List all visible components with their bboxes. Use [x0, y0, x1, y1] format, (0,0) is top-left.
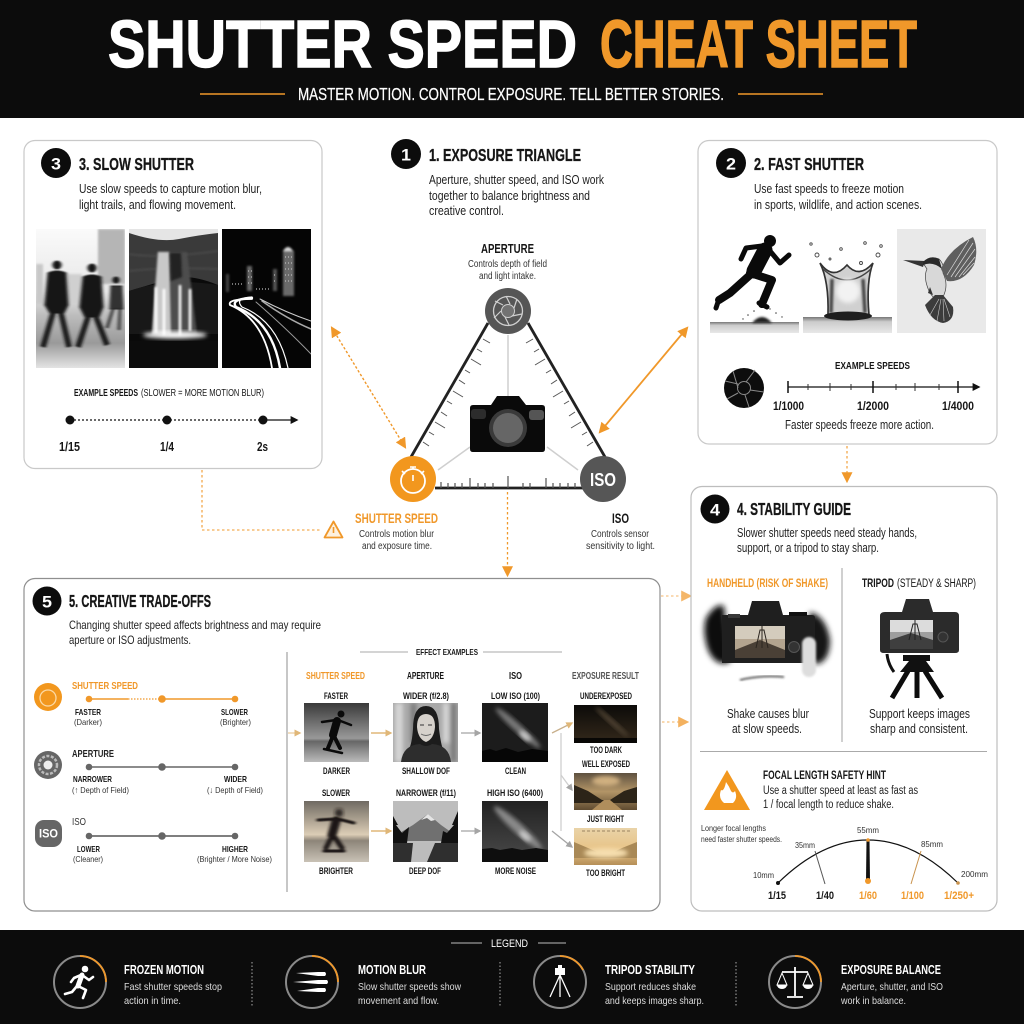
handheld camera illustration	[704, 601, 830, 688]
legend: tripod stability: Support reduces shake	[605, 981, 696, 993]
panel: slow shutter	[24, 140, 322, 468]
trade-off: iso	[35, 816, 272, 864]
row one labels: FASTER	[324, 691, 348, 702]
photo: too bright	[574, 828, 637, 865]
focal length gauge: 1/15	[768, 890, 786, 902]
icon: warning	[324, 522, 342, 538]
description: Slower shutter speeds need steady hands,	[737, 526, 917, 540]
focal length gauge: 1/40	[816, 890, 834, 902]
note: need faster shutter speeds.	[701, 835, 782, 844]
trade-off: shutter speed: SHUTTER SPEED	[72, 680, 138, 692]
aperture label	[468, 241, 547, 282]
description: light trails, and flowing movement.	[79, 198, 236, 212]
photo: underexposed	[574, 705, 637, 743]
label	[582, 745, 630, 769]
heading: 2. FAST SHUTTER	[754, 154, 864, 174]
focal length gauge: 85mm	[921, 839, 943, 849]
photo: blurred skater	[304, 801, 369, 862]
panel: stability guide	[691, 486, 997, 911]
photo: portrait	[393, 703, 458, 762]
legend: motion blur: MOTION BLUR	[358, 963, 426, 977]
title	[108, 7, 917, 82]
legend: motion blur	[286, 956, 461, 1008]
description: support, or a tripod to stay sharp.	[737, 541, 879, 555]
legend: frozen motion	[54, 956, 222, 1008]
shutter speed label: and exposure time.	[362, 541, 432, 552]
timeline	[773, 381, 979, 413]
subtitle: MASTER MOTION. CONTROL EXPOSURE. TELL BETTER STORIES.	[298, 84, 724, 104]
timeline: 1/4000	[942, 399, 974, 413]
handheld caption: Shake causes blur	[727, 707, 809, 721]
handheld caption: at slow speeds.	[732, 722, 802, 736]
trade-off: aperture: (↑ Depth of Field)	[72, 785, 129, 795]
column headings	[306, 671, 639, 682]
focal length hint: 1 / focal length to reduce shake.	[763, 799, 894, 811]
legend: exposure balance: work in balance.	[840, 995, 906, 1007]
legend: motion blur: Slow shutter speeds show	[358, 981, 461, 993]
icon: ISO: ISO	[590, 469, 616, 490]
heading: 1. EXPOSURE TRIANGLE	[429, 145, 581, 165]
photo: water splash	[803, 241, 892, 333]
header band	[0, 0, 1024, 118]
note: Longer focal lengths	[701, 824, 766, 833]
description: together to balance brightness and	[429, 189, 590, 203]
photo: waterfall	[129, 229, 218, 368]
photo: frozen skater	[304, 703, 369, 762]
legend heading: LEGEND	[491, 938, 528, 950]
trade-off: aperture: NARROWER	[73, 774, 112, 784]
trade-off: shutter speed	[34, 680, 251, 727]
focal length gauge	[753, 825, 988, 902]
legend: frozen motion: action in time.	[124, 995, 181, 1007]
legend: motion blur: movement and flow.	[358, 995, 439, 1007]
tripod caption	[869, 707, 970, 736]
legend: exposure balance: Aperture, shutter, and ISO	[841, 981, 943, 993]
timeline: 1/2000	[857, 399, 889, 413]
timeline: 1/4	[160, 440, 174, 454]
iso label: Controls sensor	[591, 529, 650, 540]
label: WELL EXPOSED	[582, 759, 630, 769]
timeline	[59, 416, 297, 454]
trade-off: aperture: APERTURE	[72, 748, 114, 760]
handheld heading: HANDHELD (RISK OF SHAKE)	[707, 578, 828, 590]
heading: 5. CREATIVE TRADE-OFFS	[69, 591, 211, 611]
description	[429, 173, 605, 218]
description: aperture or ISO adjustments.	[69, 633, 191, 647]
tripod caption: Support keeps images	[869, 707, 970, 721]
focal length hint: FOCAL LENGTH SAFETY HINT	[763, 770, 886, 782]
legend band	[0, 930, 1024, 1024]
row one labels: LOW ISO (100)	[491, 691, 540, 702]
legend: frozen motion: FROZEN MOTION	[124, 963, 204, 977]
row two labels: SLOWER	[322, 788, 350, 799]
column headings: APERTURE	[407, 671, 444, 682]
tripod heading: (STEADY & SHARP)	[897, 578, 976, 590]
description: Aperture, shutter speed, and ISO work	[429, 173, 605, 187]
row two labels	[319, 788, 543, 877]
trade-off: aperture: (↓ Depth of Field)	[207, 785, 263, 795]
badge 1: 1	[401, 146, 411, 164]
legend: exposure balance: EXPOSURE BALANCE	[841, 963, 941, 977]
badge 4: 4	[710, 500, 721, 520]
focal length gauge: 35mm	[795, 840, 815, 850]
icon: shutter	[724, 368, 764, 408]
panel: exposure triangle	[324, 139, 655, 552]
description	[69, 618, 321, 647]
trade-off: iso: ISO	[72, 816, 86, 828]
description: Use fast speeds to freeze motion	[754, 182, 904, 196]
timeline: 2s	[257, 440, 268, 454]
row one labels: UNDEREXPOSED	[580, 691, 632, 702]
timeline: 1/1000	[773, 399, 804, 413]
shutter speed label: SHUTTER SPEED	[355, 510, 438, 526]
row two labels: NARROWER (f/11)	[396, 788, 456, 799]
note	[701, 824, 782, 844]
icon: aperture	[485, 288, 531, 334]
row one labels	[323, 691, 632, 777]
effect examples heading: EFFECT EXAMPLES	[416, 647, 478, 657]
tripod caption: sharp and consistent.	[870, 722, 968, 736]
legend: tripod stability: and keeps images sharp.	[605, 995, 704, 1007]
trade-off: aperture: WIDER	[224, 774, 247, 784]
aperture label: Controls depth of field	[468, 259, 547, 270]
example speeds caption: EXAMPLE SPEEDS	[74, 387, 138, 399]
trade-off: shutter speed: (Darker)	[74, 717, 102, 727]
iso label: sensitivity to light.	[586, 541, 655, 552]
row one labels: CLEAN	[505, 766, 526, 777]
tripod heading	[862, 578, 976, 590]
label: TOO DARK	[590, 745, 622, 755]
triangle	[411, 323, 605, 488]
column headings: SHUTTER SPEED	[306, 671, 365, 682]
legend heading	[451, 938, 566, 950]
badge 4	[700, 494, 730, 524]
example speeds caption: EXAMPLE SPEEDS	[835, 360, 910, 372]
aperture label: and light intake.	[479, 271, 536, 282]
row two labels: HIGH ISO (6400)	[487, 788, 543, 799]
tripod camera illustration	[880, 599, 959, 698]
focal length hint	[763, 770, 918, 811]
handheld caption	[727, 707, 809, 736]
trade-off: shutter speed: SLOWER	[221, 707, 248, 717]
iso label	[586, 510, 655, 552]
badge 2	[716, 148, 746, 178]
photo: well exposed	[574, 773, 637, 810]
photo: light trails	[222, 229, 311, 368]
photo: low iso night sky	[482, 703, 548, 762]
label: TOO BRIGHT	[586, 868, 625, 878]
description	[737, 526, 917, 555]
description: in sports, wildlife, and action scenes.	[754, 198, 922, 212]
column headings: EXPOSURE RESULT	[572, 671, 639, 682]
badge 2: 2	[726, 154, 736, 174]
tripod heading: TRIPOD	[862, 578, 894, 590]
arrows row two	[371, 723, 572, 847]
focal length gauge: 55mm	[857, 825, 879, 835]
legend: tripod stability: TRIPOD STABILITY	[605, 963, 696, 977]
row one labels: SHALLOW DOF	[402, 766, 450, 777]
connector arrows	[202, 328, 847, 722]
row one labels: WIDER (f/2.8)	[403, 691, 449, 702]
focal length gauge: 1/60	[859, 890, 877, 902]
row two labels: DEEP DOF	[409, 866, 441, 877]
trade-off: aperture	[34, 748, 263, 795]
badge 3: 3	[51, 154, 61, 174]
aperture label: APERTURE	[481, 241, 534, 256]
icon: camera	[470, 396, 545, 452]
photo: high iso night sky	[482, 801, 548, 862]
row two labels: MORE NOISE	[495, 866, 536, 877]
shutter speed label	[355, 510, 438, 552]
column headings: ISO	[509, 671, 522, 682]
photo: kingfisher	[897, 229, 986, 333]
iso label: ISO	[612, 510, 629, 526]
description: Changing shutter speed affects brightness and may require	[69, 618, 321, 632]
legend: exposure balance	[769, 956, 943, 1008]
focal length gauge: 10mm	[753, 870, 774, 880]
description	[754, 182, 922, 212]
icon: stopwatch	[390, 456, 436, 502]
heading: 3. SLOW SHUTTER	[79, 154, 194, 174]
panel: fast shutter	[698, 140, 997, 444]
photo: blurred walkers	[36, 229, 125, 368]
trade-off: shutter speed: (Brighter)	[220, 717, 251, 727]
focal length gauge: 1/100	[901, 890, 924, 902]
badge 1	[391, 139, 421, 169]
trade-off: shutter speed: FASTER	[75, 707, 101, 717]
label: JUST RIGHT	[587, 814, 624, 824]
badge 3	[41, 148, 71, 178]
trade-off: iso: (Cleaner)	[73, 854, 103, 864]
example speeds caption	[74, 387, 264, 399]
row one labels: DARKER	[323, 766, 350, 777]
shutter speed label: Controls motion blur	[359, 529, 435, 540]
timeline: 1/15	[59, 440, 80, 454]
badge 5: 5	[42, 592, 52, 612]
arrows row one	[288, 732, 480, 734]
panel: creative trade-offs	[24, 578, 660, 911]
focal length gauge: 200mm	[961, 869, 988, 879]
example speeds caption: (SLOWER = MORE MOTION BLUR)	[141, 387, 264, 399]
photo: mountain landscape	[393, 801, 458, 862]
trade-off: iso: (Brighter / More Noise)	[197, 854, 272, 864]
trade-off: iso: ISO	[39, 828, 58, 840]
badge 5	[32, 586, 62, 616]
row two labels: BRIGHTER	[319, 866, 353, 877]
description	[79, 182, 262, 212]
legend: frozen motion: Fast shutter speeds stop	[124, 981, 222, 993]
photo: runner	[710, 235, 799, 333]
focal length hint: Use a shutter speed at least as fast as	[763, 785, 918, 797]
legend: tripod stability	[534, 956, 704, 1008]
trade-off: iso: LOWER	[77, 844, 100, 854]
icon: ISO	[580, 456, 626, 502]
description: creative control.	[429, 204, 504, 218]
icon: warning flame	[704, 770, 750, 810]
heading: 4. STABILITY GUIDE	[737, 499, 851, 519]
trade-off: iso: HIGHER	[222, 844, 248, 854]
title: SHUTTER SPEED	[108, 7, 577, 82]
focal length gauge: 1/250+	[944, 890, 974, 902]
description: Use slow speeds to capture motion blur,	[79, 182, 262, 196]
caption: Faster speeds freeze more action.	[785, 418, 934, 432]
